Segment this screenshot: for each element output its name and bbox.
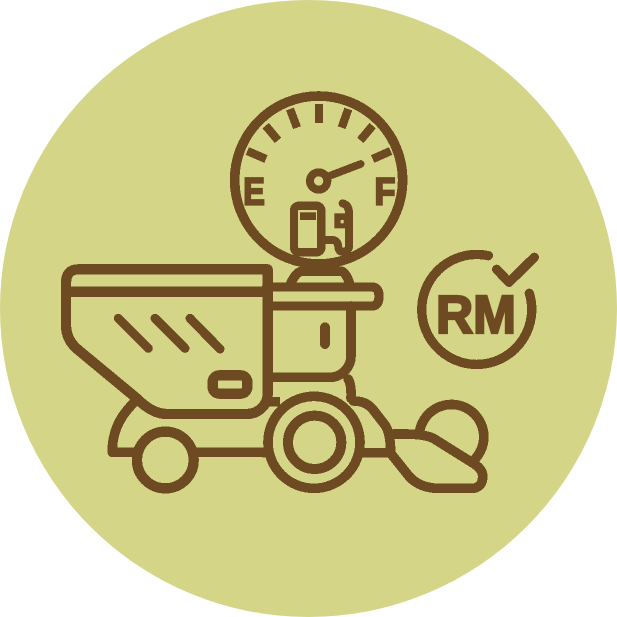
icon: ringgit cost badge [422,254,534,364]
gauge tick marks [247,104,391,159]
icon: grain hopper [66,269,268,488]
cab door handle [310,327,340,344]
hopper hatch [213,375,247,394]
front fender [353,401,483,488]
gauge needle [310,164,361,190]
cab roof [267,287,379,306]
hopper rim band [66,276,268,308]
icon: fuel pump [294,203,349,252]
icon: cab and front machinery [263,287,484,488]
cab body [269,306,351,398]
check mark [497,257,534,282]
hopper highlight strokes [118,318,220,349]
badge ring [422,254,532,364]
chassis links [263,402,280,453]
gauge dial ring [235,96,403,264]
main wheel [268,396,360,488]
hopper body [66,269,268,414]
rear wheel [137,432,194,488]
rear fender and chassis [112,402,267,452]
currency text: RM [436,286,516,345]
icon: fuel gauge [235,96,403,264]
label: empty: E [243,171,265,213]
icon: gauge mount dome [290,271,350,285]
front dome [419,404,484,460]
label: full: F [375,171,395,213]
